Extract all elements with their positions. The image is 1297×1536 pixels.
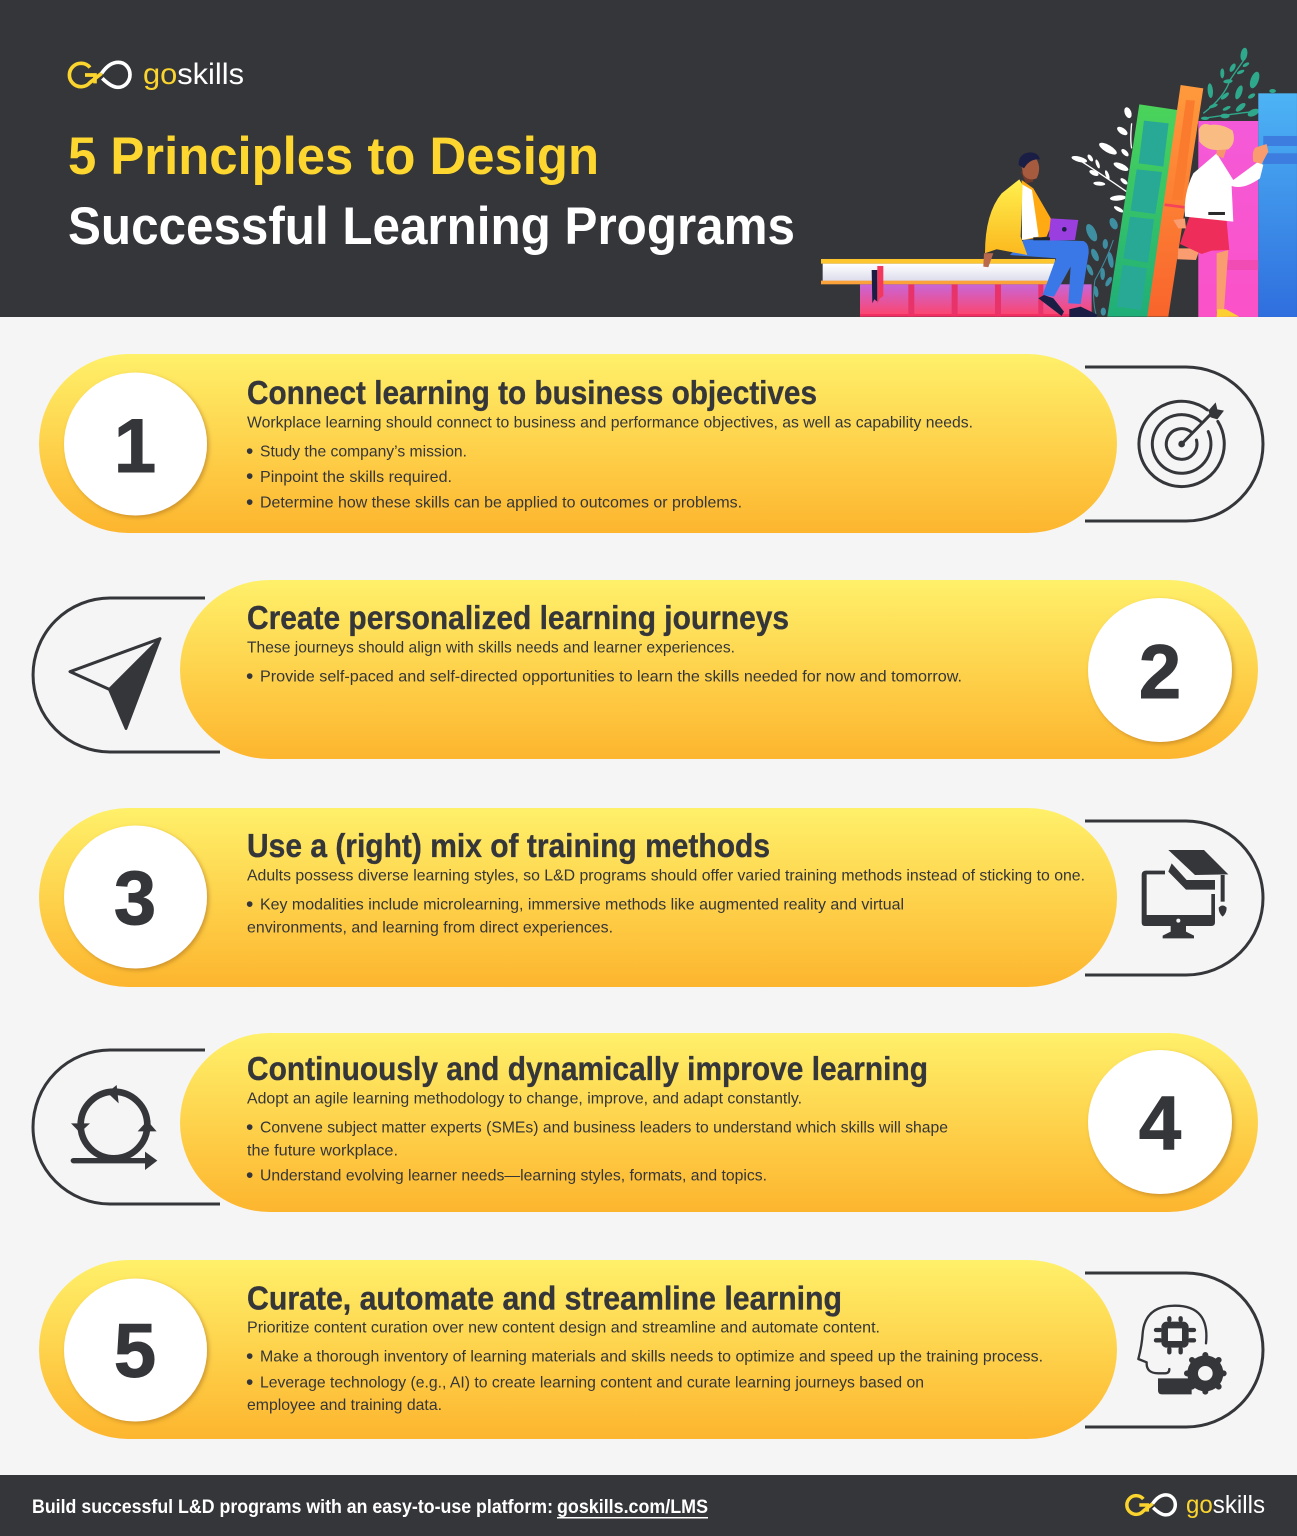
heading: Create personalized learning journeys bbox=[247, 599, 789, 636]
footer logo mark bbox=[1127, 1495, 1175, 1515]
title line 1: 5 Principles to Design bbox=[68, 127, 599, 186]
heading: Connect learning to business objectives bbox=[247, 374, 817, 411]
footer logo bbox=[1127, 1491, 1265, 1519]
green book bbox=[1107, 104, 1177, 317]
outline tab with navigation icon bbox=[33, 598, 220, 752]
header band bbox=[0, 0, 1297, 317]
number badge: 5 bbox=[114, 1309, 156, 1394]
body text: Adopt an agile learning methodology to change, improve, and adapt constantly. bbox=[247, 1090, 802, 1108]
heading: Continuously and dynamically improve learning bbox=[247, 1050, 928, 1087]
body text bbox=[246, 1090, 948, 1187]
body text: Convene subject matter experts (SMEs) and business leaders to understand which skills will shape bbox=[260, 1120, 948, 1136]
heading: Curate, automate and streamline learning bbox=[247, 1280, 842, 1316]
outline tab with online education icon bbox=[1085, 821, 1263, 975]
heading: Use a (right) mix of training methods bbox=[247, 827, 770, 864]
footer band bbox=[0, 1475, 1297, 1536]
body text: Determine how these skills can be applied to outcomes or problems. bbox=[260, 494, 742, 512]
yellow pill bbox=[39, 354, 1117, 533]
body text: environments, and learning from direct experiences. bbox=[247, 920, 613, 936]
body text bbox=[246, 868, 1085, 936]
number badge: 4 bbox=[1139, 1081, 1181, 1166]
icon: agile loop bbox=[71, 1085, 157, 1170]
outline tab with target icon bbox=[1085, 367, 1263, 521]
body text: the future workplace. bbox=[247, 1142, 398, 1160]
blue book bbox=[1258, 93, 1297, 317]
footer link: goskills.com/LMS bbox=[557, 1497, 708, 1518]
outline tab with agile icon bbox=[33, 1050, 220, 1204]
bookmark bbox=[872, 266, 883, 303]
principle 1 bbox=[39, 354, 1263, 533]
number badge bbox=[64, 372, 207, 516]
body text: Make a thorough inventory of learning materials and skills needs to optimize and speed up the training process. bbox=[260, 1348, 1043, 1366]
number badge: 1 bbox=[114, 404, 156, 489]
lower pink book bbox=[860, 284, 1092, 317]
pink book bbox=[1198, 121, 1258, 317]
yellow pill bbox=[39, 808, 1117, 987]
upper white book bbox=[821, 259, 1055, 284]
body text: • bbox=[246, 491, 253, 514]
body text: Provide self-paced and self-directed opportunities to learn the skills needed for now and tomorrow. bbox=[260, 668, 962, 686]
body text: These journeys should align with skills needs and learner experiences. bbox=[247, 640, 735, 656]
body text: Key modalities include microlearning, immersive methods like augmented reality and virtual bbox=[260, 896, 904, 914]
body text: Workplace learning should connect to business and performance objectives, as well as capability needs. bbox=[247, 414, 973, 432]
yellow pill bbox=[39, 1260, 1117, 1439]
icon: monitor with graduation cap bbox=[1142, 850, 1228, 938]
icon: target bbox=[1139, 401, 1224, 487]
outline tab with AI head icon bbox=[1085, 1273, 1263, 1427]
principle 2 bbox=[33, 580, 1258, 759]
illustration: books and learners bbox=[821, 47, 1297, 317]
body text: • bbox=[246, 465, 253, 488]
body text: employee and training data. bbox=[247, 1397, 442, 1414]
body text: • bbox=[246, 1345, 253, 1368]
body text: Study the company’s mission. bbox=[260, 444, 467, 460]
body text: Prioritize content curation over new content design and streamline and automate content. bbox=[247, 1320, 880, 1336]
orange book bbox=[1147, 85, 1203, 317]
body text bbox=[246, 414, 973, 514]
body text bbox=[246, 640, 962, 688]
number badge bbox=[64, 1278, 207, 1422]
body text: • bbox=[246, 440, 253, 463]
body text: Pinpoint the skills required. bbox=[260, 469, 452, 486]
yellow pill bbox=[180, 580, 1258, 759]
body text: Leverage technology (e.g., AI) to create learning content and curate learning journeys based on bbox=[260, 1374, 924, 1392]
body text: • bbox=[246, 1371, 253, 1394]
body text: • bbox=[246, 1116, 253, 1139]
standing woman bbox=[1173, 124, 1268, 317]
seated man bbox=[983, 152, 1097, 317]
body text: • bbox=[246, 893, 253, 916]
footer logo wordmark: goskills bbox=[1186, 1491, 1265, 1519]
number badge: 2 bbox=[1139, 630, 1181, 715]
number badge bbox=[1088, 598, 1232, 742]
yellow pill bbox=[180, 1033, 1258, 1212]
title line 2: Successful Learning Programs bbox=[68, 197, 795, 256]
principle 3 bbox=[39, 808, 1263, 987]
body text: • bbox=[246, 1164, 253, 1187]
white plant bbox=[1071, 106, 1133, 214]
body text: Understand evolving learner needs—learning styles, formats, and topics. bbox=[260, 1168, 767, 1184]
body text: Adults possess diverse learning styles, so L&D programs should offer varied training methods instead of sticking to one. bbox=[247, 868, 1085, 884]
teal plant bbox=[1084, 217, 1119, 317]
number badge: 3 bbox=[114, 856, 156, 941]
icon: head with chip and gear bbox=[1138, 1306, 1224, 1394]
principle 5 bbox=[39, 1260, 1263, 1439]
goskills logo bbox=[69, 58, 244, 91]
icon: paper plane bbox=[70, 639, 160, 729]
logo wordmark: goskills bbox=[143, 58, 244, 91]
principle 4 bbox=[33, 1033, 1258, 1212]
number badge bbox=[1088, 1050, 1232, 1194]
green plant bbox=[1201, 47, 1276, 120]
logo mark: infinity arrow bbox=[69, 62, 130, 87]
call to action: Build successful L&D programs with an easy-to-use platform: bbox=[32, 1497, 553, 1518]
number badge bbox=[64, 826, 207, 968]
body text: • bbox=[246, 665, 253, 688]
body text bbox=[246, 1320, 1043, 1414]
